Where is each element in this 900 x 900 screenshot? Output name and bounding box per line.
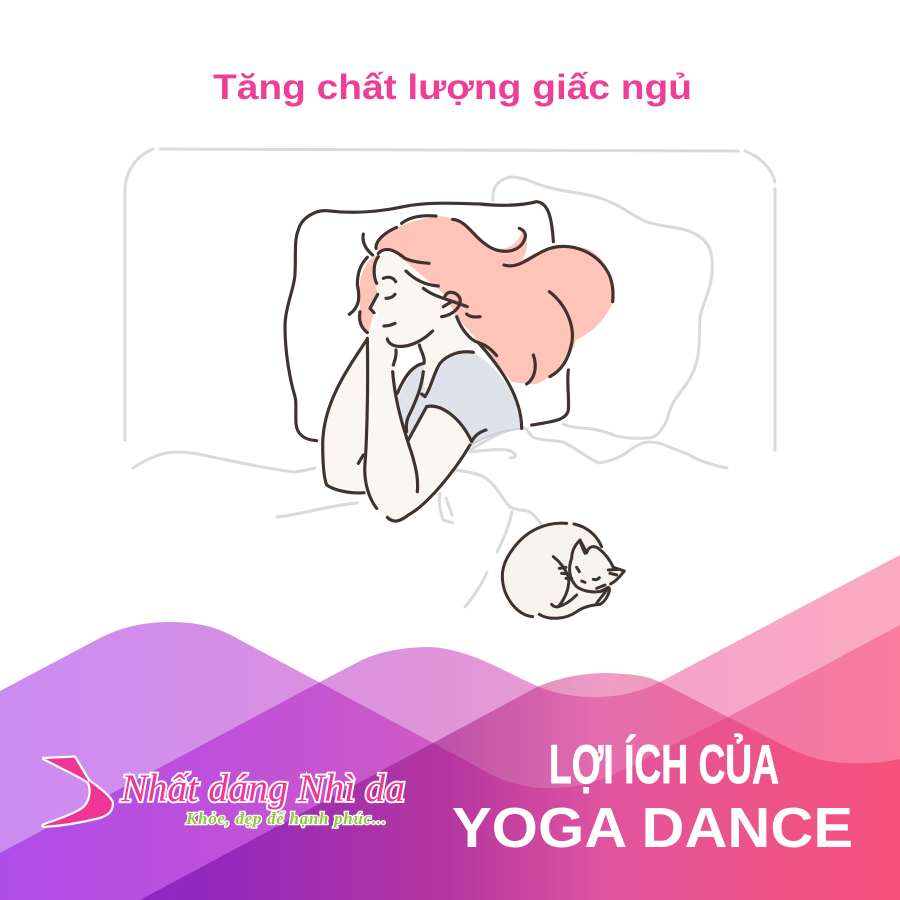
logo icon <box>42 756 113 827</box>
neck fill <box>397 345 424 393</box>
wave: back mountain layer <box>0 622 900 900</box>
hair lines <box>349 216 613 384</box>
skin fill <box>367 250 478 440</box>
pillow outline <box>285 202 569 441</box>
title: Tăng chất lượng giấc ngủ <box>213 68 692 107</box>
wave: middle layer <box>0 555 900 900</box>
arms fill <box>323 337 472 522</box>
cat lines <box>502 523 624 618</box>
bed and blanket outlines <box>125 149 775 607</box>
wave background <box>0 555 900 900</box>
cat body fill <box>502 523 624 619</box>
heading: yoga dance: YOGA DANCE <box>452 796 853 860</box>
blanket edge <box>472 428 522 445</box>
logo tagline: Khỏe, đẹp để hạnh phúc... <box>185 809 386 828</box>
heading: benefits of: LỢI ÍCH CỦA <box>549 733 779 795</box>
wave: front layer <box>140 673 900 900</box>
illustration: sleeping cat <box>502 523 624 619</box>
hair fill <box>359 216 613 384</box>
body lines <box>323 317 522 521</box>
illustration: sleeping woman <box>285 202 613 522</box>
logo wordmark: Nhất dáng Nhì da <box>120 767 405 810</box>
shirt fill <box>398 352 522 445</box>
face lines <box>370 277 460 346</box>
